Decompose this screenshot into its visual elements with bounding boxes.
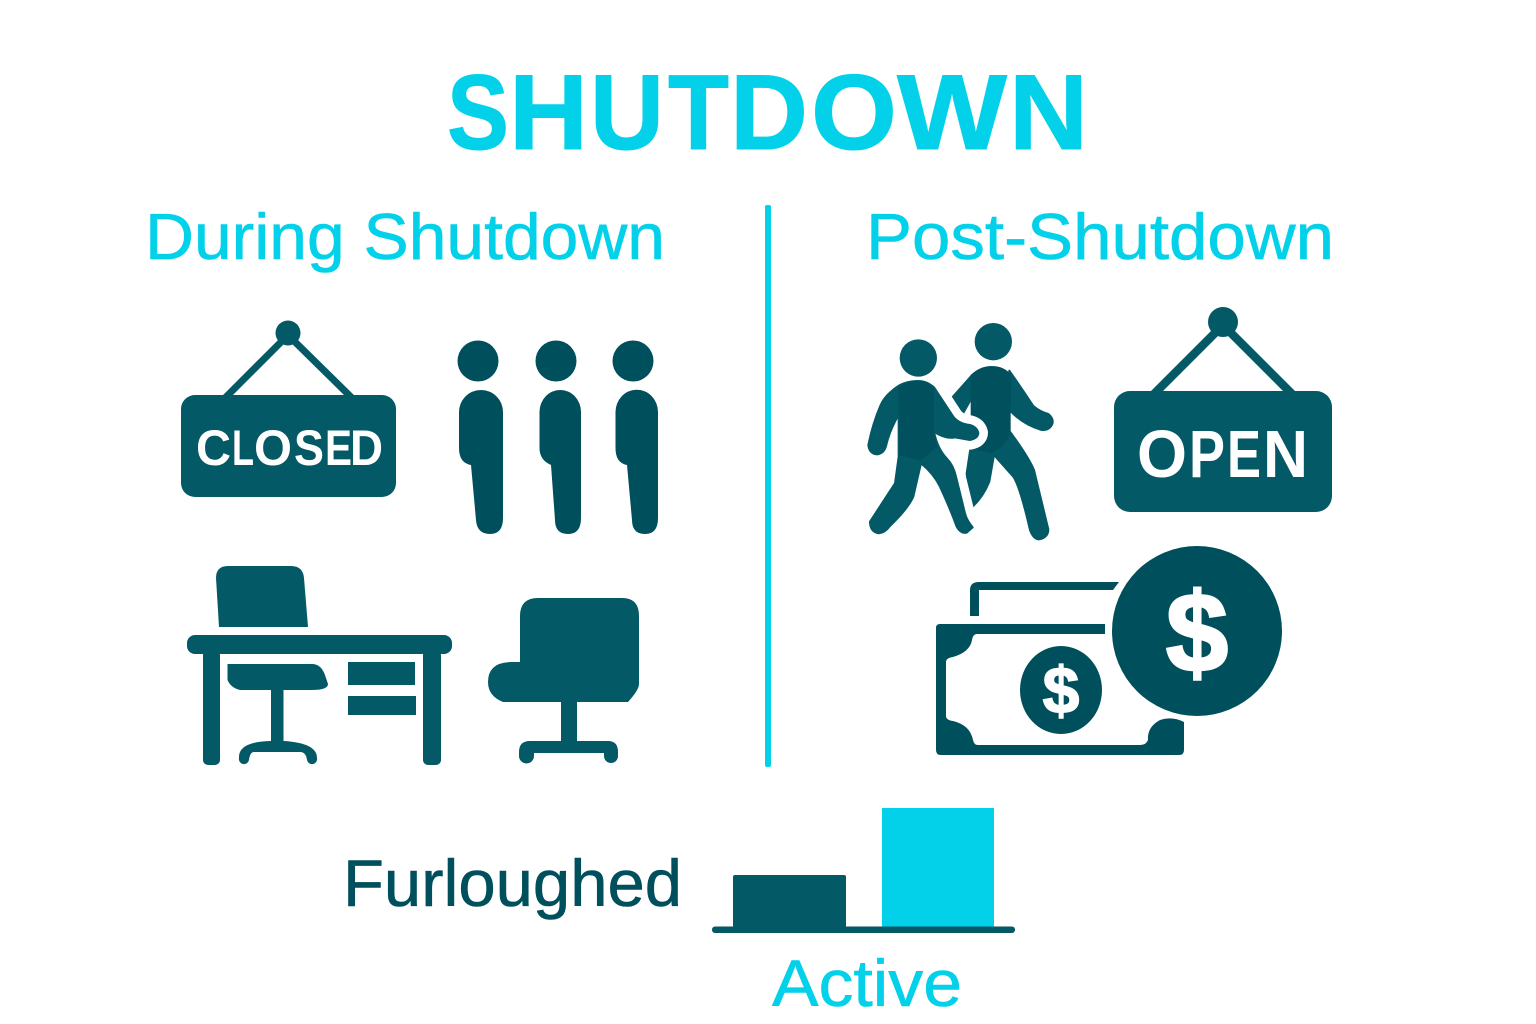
icon: banknotes and dollar coin: $: [1043, 653, 1079, 727]
title: S: [447, 52, 509, 172]
title: N: [1009, 52, 1088, 172]
icon: closed sign: L: [232, 420, 254, 476]
icon: open sign: N: [1263, 417, 1308, 492]
label: Furloughed: Furloughed: [343, 846, 682, 920]
icon: two people walking: [868, 323, 1053, 539]
person in front: [868, 339, 978, 533]
icon: closed sign: O: [254, 420, 292, 476]
icon: banknotes and dollar coin: [936, 546, 1282, 755]
title: D: [730, 52, 808, 172]
icon: open sign: [1114, 307, 1332, 512]
icon: closed sign: S: [294, 420, 324, 476]
bar chart: furloughed vs active: [712, 808, 1015, 933]
icon: banknotes and dollar coin: $: [1166, 570, 1228, 695]
label: Active: Active: [772, 946, 962, 1020]
title: O: [811, 52, 897, 172]
icon: open sign: O: [1137, 417, 1187, 492]
title: W: [897, 52, 1007, 172]
icon: three standing people: [458, 340, 658, 534]
center divider: [765, 205, 771, 767]
icon: closed sign: E: [325, 420, 352, 476]
icon: open sign: E: [1227, 417, 1261, 492]
heading: During Shutdown: During Shutdown: [145, 200, 665, 273]
icon: empty desk with monitor: [187, 566, 452, 765]
person behind: [952, 323, 1053, 539]
title: [447, 52, 1088, 172]
icon: open sign: P: [1189, 417, 1225, 492]
title: H: [509, 52, 588, 172]
icon: closed sign: D: [350, 420, 383, 476]
title: U: [590, 52, 664, 172]
icon: closed sign: [181, 320, 396, 497]
heading: Post-Shutdown: Post-Shutdown: [866, 200, 1334, 273]
icon: closed sign: C: [196, 420, 231, 476]
title: T: [668, 52, 729, 172]
icon: empty office chair: [488, 598, 639, 764]
